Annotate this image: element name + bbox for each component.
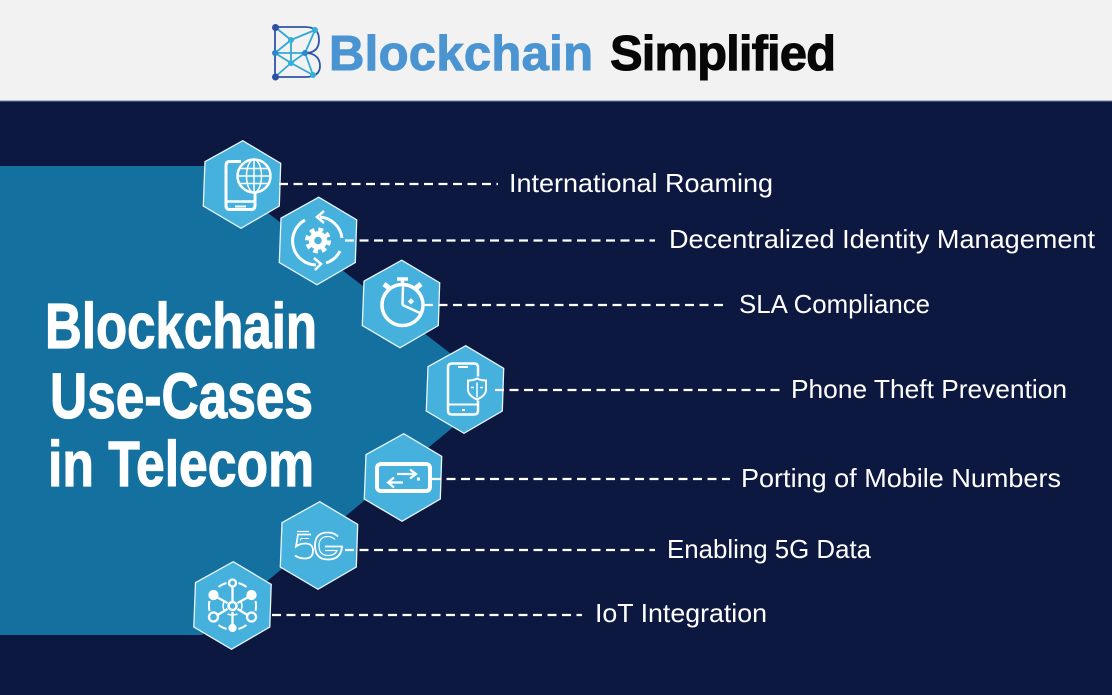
use-case labels: Enabling 5G Data [667,534,872,564]
use-case labels: IoT Integration [595,598,767,628]
use-case labels: International Roaming [509,168,773,198]
icon: 5G hexagon [280,502,358,589]
left arrow arc [293,220,316,265]
use-case labels: SLA Compliance [739,289,930,319]
header band [0,0,1112,102]
use-case labels: Decentralized Identity Management [669,224,1096,254]
use-case labels [509,168,1096,628]
logo wordmark [329,27,836,81]
main title: Blockchain [45,290,317,362]
lower right arc [326,251,340,263]
right arrow arc [320,217,342,238]
use-case labels: Phone Theft Prevention [791,374,1067,404]
icon: mobile number porting hexagon [364,434,442,521]
main title: Use-Cases [50,360,313,432]
icon: SLA stopwatch hexagon [362,260,440,348]
icon: phone theft prevention hexagon [426,346,504,433]
logo wordmark: Blockchain [329,27,593,81]
icon: IoT hexagon [194,562,271,649]
icon: international roaming hexagon [203,141,281,228]
teal arrow panel [0,166,498,635]
icon: blockchain logo [272,24,320,80]
main title: in Telecom [48,428,314,500]
use-case labels: Porting of Mobile Numbers [741,463,1061,493]
gear [308,230,328,251]
main title [45,290,317,500]
logo wordmark: Simplified [610,27,836,81]
icon: identity management hexagon [279,197,357,285]
dashed connectors [272,184,782,615]
